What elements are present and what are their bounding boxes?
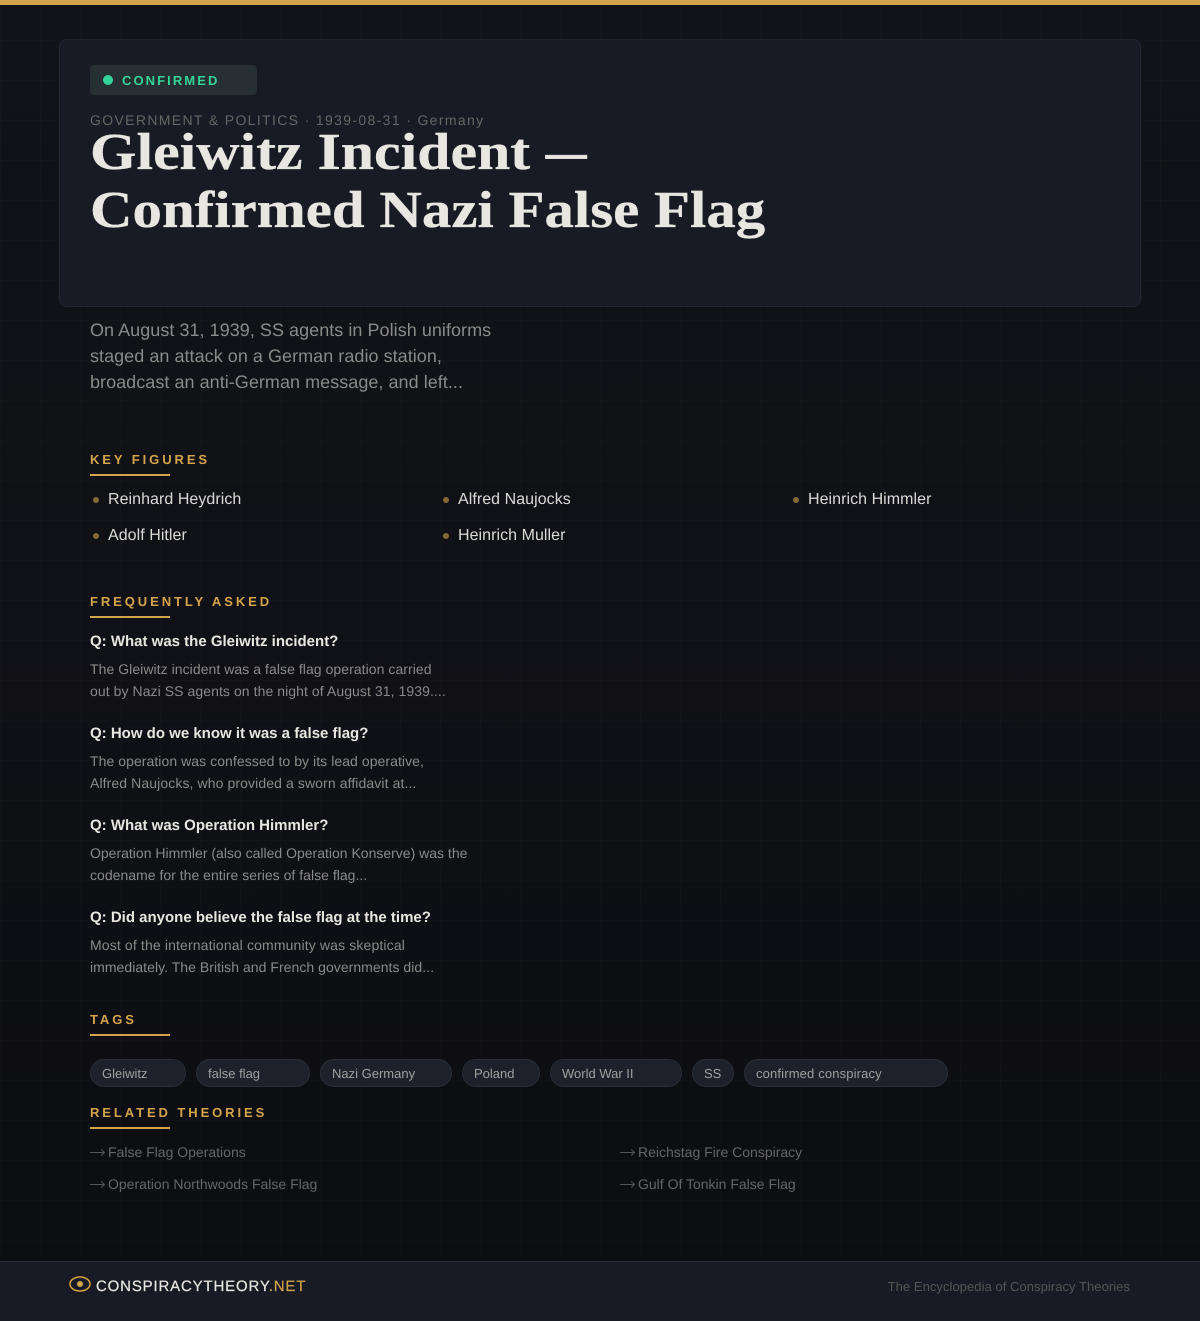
badge label: CONFIRMED <box>122 73 219 88</box>
top accent bar <box>0 0 1200 5</box>
related: Gulf Of Tonkin False Flag: Gulf Of Tonkin False Flag <box>638 1176 796 1192</box>
heading: frequently asked: FREQUENTLY ASKED <box>90 594 272 609</box>
tag: Nazi Germany <box>320 1059 452 1087</box>
title: Confirmed Nazi False Flag <box>90 182 765 239</box>
badge dot <box>103 75 113 85</box>
tag: Gleiwitz: Gleiwitz <box>102 1066 148 1081</box>
tag: false flag: false flag <box>208 1066 260 1081</box>
tag: World War II: World War II <box>562 1066 634 1081</box>
icon: eye logo <box>69 1276 91 1292</box>
faq question 3: Q: What was Operation Himmler? <box>90 817 328 834</box>
faq answer 1: The Gleiwitz incident was a false flag operation carried <box>90 661 432 677</box>
title <box>90 124 765 239</box>
tag: false flag <box>196 1059 310 1087</box>
faq question 4: Q: Did anyone believe the false flag at the time? <box>90 909 431 926</box>
tag: World War II <box>550 1059 682 1087</box>
tag: Nazi Germany: Nazi Germany <box>332 1066 415 1081</box>
tag: SS <box>692 1059 734 1087</box>
faq question 2: Q: How do we know it was a false flag? <box>90 725 368 742</box>
summary text: broadcast an anti-German message, and left... <box>90 372 463 392</box>
faq answer 1 <box>90 661 446 699</box>
faq answer 2 <box>90 753 424 791</box>
footer <box>0 1261 1200 1321</box>
faq answer 4: Most of the international community was skeptical <box>90 937 405 953</box>
faq answer 3 <box>90 845 467 883</box>
faq answer 1: out by Nazi SS agents on the night of August 31, 1939.... <box>90 683 446 699</box>
heading: related theories: RELATED THEORIES <box>90 1105 267 1120</box>
status badge <box>90 65 257 95</box>
related: Operation Northwoods False Flag: Operation Northwoods False Flag <box>108 1176 317 1192</box>
summary text <box>90 320 491 392</box>
tag: SS: SS <box>704 1066 721 1081</box>
tag: Gleiwitz <box>90 1059 186 1087</box>
faq answer 3: codename for the entire series of false flag... <box>90 867 367 883</box>
tag: Poland <box>462 1059 540 1087</box>
faq answer 4: immediately. The British and French governments did... <box>90 959 434 975</box>
key figures list <box>93 491 932 544</box>
panel: hero header <box>59 39 1141 307</box>
figure: Reinhard Heydrich: Reinhard Heydrich <box>108 491 241 508</box>
title: Gleiwitz Incident <box>90 124 530 181</box>
figure: Heinrich Himmler: Heinrich Himmler <box>808 491 931 508</box>
faq answer 3: Operation Himmler (also called Operation Konserve) was the <box>90 845 467 861</box>
footer logo text: CONSPIRACYTHEORY.NET <box>96 1278 306 1295</box>
faq answer 2: The operation was confessed to by its lead operative, <box>90 753 424 769</box>
summary text: On August 31, 1939, SS agents in Polish uniforms <box>90 320 491 340</box>
related: Reichstag Fire Conspiracy: Reichstag Fire Conspiracy <box>638 1144 802 1160</box>
faq answer 4 <box>90 937 434 975</box>
title: — <box>545 124 586 181</box>
figure: Alfred Naujocks: Alfred Naujocks <box>458 491 571 508</box>
faq answer 2: Alfred Naujocks, who provided a sworn affidavit at... <box>90 775 416 791</box>
figure: Heinrich Muller: Heinrich Muller <box>458 527 565 544</box>
faq question 1: Q: What was the Gleiwitz incident? <box>90 633 338 650</box>
related: False Flag Operations: False Flag Operations <box>108 1144 246 1160</box>
tag: confirmed conspiracy <box>744 1059 948 1087</box>
summary text: staged an attack on a German radio station, <box>90 346 442 366</box>
tag: confirmed conspiracy: confirmed conspiracy <box>756 1066 882 1081</box>
meta line: GOVERNMENT & POLITICS · 1939-08-31 · Germany <box>90 112 484 128</box>
heading: key figures: KEY FIGURES <box>90 452 210 467</box>
heading: tags: TAGS <box>90 1012 137 1027</box>
figure: Adolf Hitler: Adolf Hitler <box>108 527 187 544</box>
footer tagline: The Encyclopedia of Conspiracy Theories <box>888 1279 1130 1294</box>
tag: Poland: Poland <box>474 1066 514 1081</box>
